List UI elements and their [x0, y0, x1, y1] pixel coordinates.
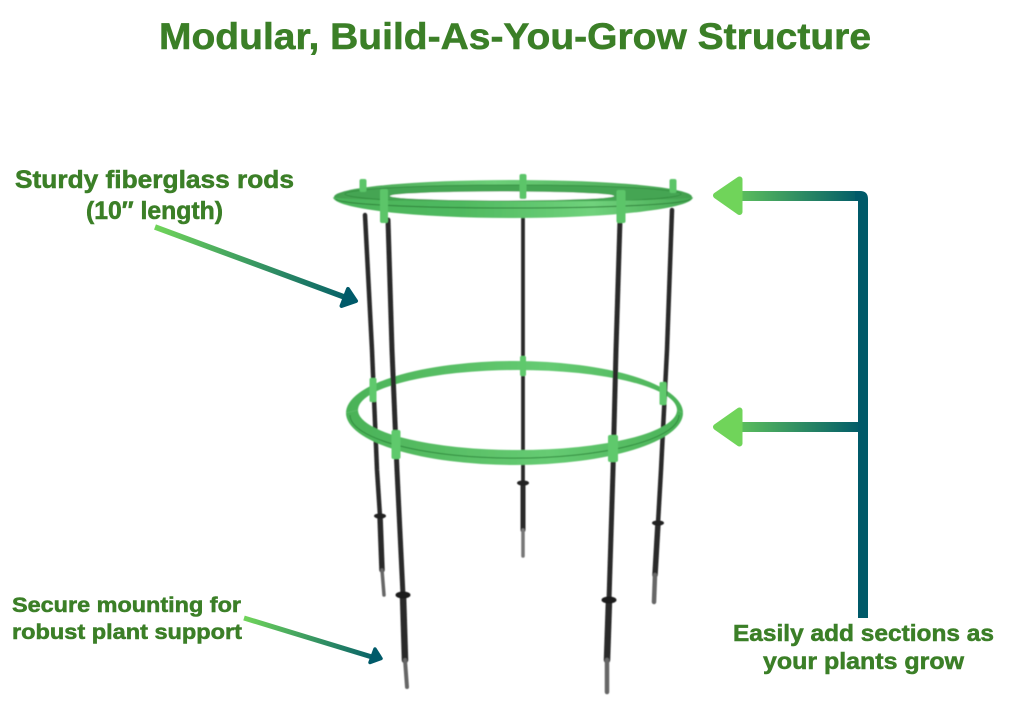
- lower ring front half over far rods: [346, 410, 683, 465]
- rod: far right: [652, 210, 672, 602]
- title: Modular, Build-As-You-Grow Structure: [159, 16, 871, 57]
- top ring front band: [333, 197, 693, 218]
- arrow: lower section: [716, 410, 860, 444]
- rod: centre: [517, 199, 529, 556]
- top ring opening: [390, 192, 614, 200]
- top ring back band: [334, 180, 692, 214]
- label: easily add sections: your plants grow: [763, 648, 965, 674]
- label: easily add sections: Easily add sections as: [733, 620, 994, 646]
- rod: far left: [365, 215, 386, 595]
- label: secure mounting: robust plant support: [12, 620, 242, 644]
- label: fiberglass rods: Sturdy fiberglass rods: [15, 166, 294, 194]
- lower ring lip line: [350, 415, 679, 458]
- arrow: to fiberglass rod: [155, 227, 356, 306]
- arrow: to mounting stake: [244, 618, 381, 662]
- rod: near right: [602, 220, 620, 692]
- top ring clips: [360, 174, 676, 223]
- top ring inner surface: [345, 185, 681, 203]
- label: secure mounting: Secure mounting for: [12, 593, 242, 617]
- vertical connector: [855, 191, 868, 618]
- lower ring clips: [370, 356, 666, 462]
- rod: near left: [388, 220, 410, 687]
- label: fiberglass rods: (10″ length): [86, 197, 223, 225]
- label: easily add sections: [733, 620, 994, 674]
- bracket: add-section arrows: [716, 180, 868, 618]
- label: fiberglass rods: [15, 166, 294, 225]
- arrow: top section: [716, 180, 858, 212]
- label: secure mounting: [12, 593, 242, 644]
- lower ring back half: [346, 361, 683, 413]
- plant support structure: [333, 174, 693, 692]
- top ring lip line: [336, 199, 690, 208]
